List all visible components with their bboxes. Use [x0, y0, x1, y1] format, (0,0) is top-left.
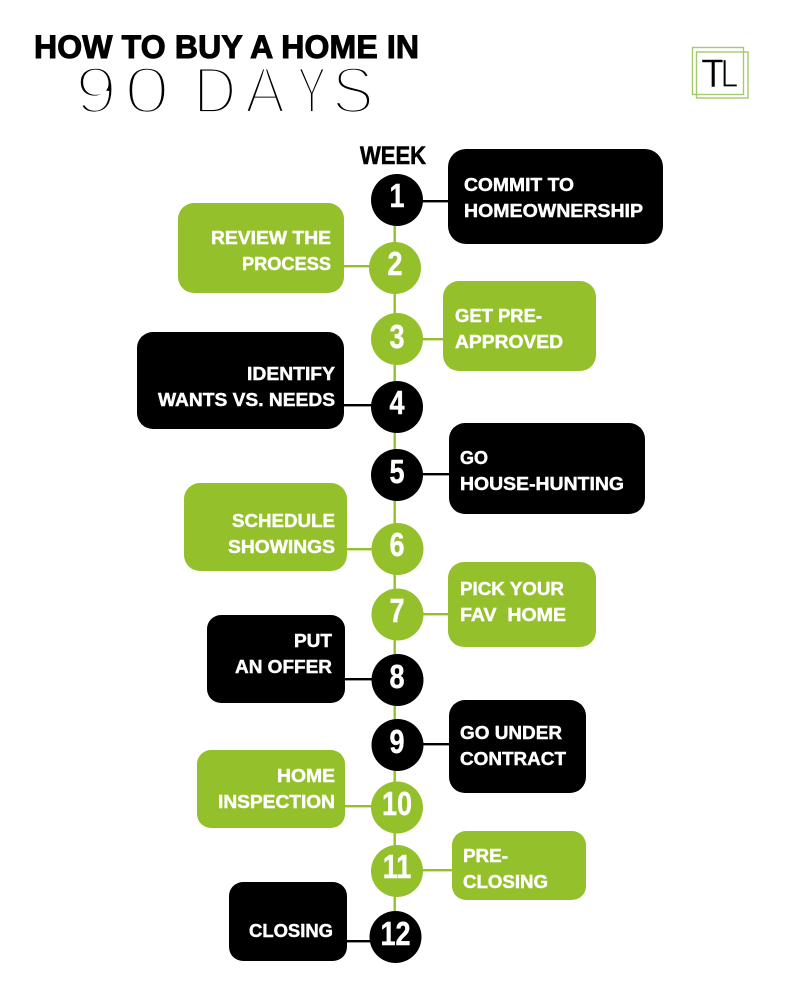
step 11: pre-closing: CLOSING [463, 872, 548, 892]
step 10: home inspection: INSPECTION [218, 792, 335, 812]
step 12: closing: 12 [380, 917, 411, 953]
step 11: pre-closing: 11 [383, 850, 411, 886]
step 10: home inspection [197, 750, 423, 834]
step 8: put an offer [207, 615, 424, 706]
step 11: pre-closing: PRE- [463, 846, 508, 866]
step 5: go house-hunting: 5 [389, 455, 405, 491]
timeline spine [394, 200, 396, 937]
step 4: identify wants vs. needs: IDENTIFY [247, 364, 335, 384]
step 8: put an offer: AN OFFER [235, 657, 332, 677]
logo: TL monogram: L [720, 51, 738, 96]
step 7: pick your fav home: 7 [389, 594, 405, 630]
logo: TL monogram: T [701, 52, 725, 96]
step 2: review the process: 2 [387, 247, 403, 283]
step 9: go under contract [372, 700, 586, 793]
step 6: schedule showings [184, 483, 424, 575]
step 9: go under contract: GO UNDER [460, 723, 562, 743]
step 2: review the process: PROCESS [242, 254, 331, 274]
title line: 90 days: A [245, 54, 285, 128]
step 7: pick your fav home [372, 562, 596, 647]
step 11: pre-closing [371, 831, 586, 900]
step 6: schedule showings: SHOWINGS [228, 537, 335, 557]
step 5: go house-hunting [371, 423, 645, 514]
week heading: WEEK [360, 142, 426, 170]
step 1: commit to homeownership: 1 [389, 179, 405, 215]
step 3: get pre-approved: 3 [389, 320, 405, 356]
step 8: put an offer: PUT [294, 631, 332, 651]
step 12: closing: CLOSING [249, 921, 333, 941]
step 1: commit to homeownership [371, 149, 663, 244]
step 7: pick your fav home: FAV HOME [460, 605, 566, 625]
step 7: pick your fav home: PICK YOUR [460, 579, 564, 599]
title line: how to buy a home in: HOW TO BUY A HOME IN [34, 29, 419, 65]
logo: TL monogram [692, 48, 748, 98]
title line: 90 days: D [194, 54, 236, 128]
title line: 90 days: Y [297, 53, 326, 127]
step 1: commit to homeownership: HOMEOWNERSHIP [464, 201, 643, 221]
step 8: put an offer: 8 [389, 660, 405, 696]
title [34, 29, 419, 128]
step 5: go house-hunting: HOUSE-HUNTING [460, 474, 624, 494]
step 3: get pre-approved: GET PRE- [455, 306, 542, 326]
step 2: review the process [178, 203, 421, 294]
step 9: go under contract: CONTRACT [460, 749, 566, 769]
step 1: commit to homeownership: COMMIT TO [464, 175, 574, 195]
title line: 90 days: S [332, 54, 374, 127]
step 6: schedule showings: 6 [389, 528, 405, 564]
step 2: review the process: REVIEW THE [211, 228, 331, 248]
title line: 90 days: 0 [124, 53, 170, 127]
step 4: identify wants vs. needs: WANTS VS. NEEDS [158, 390, 335, 410]
step 5: go house-hunting: GO [460, 448, 488, 468]
title line: 90 days [75, 53, 374, 128]
step 4: identify wants vs. needs [137, 332, 423, 433]
step 10: home inspection: HOME [277, 766, 335, 786]
step 10: home inspection: 10 [382, 787, 412, 823]
step 4: identify wants vs. needs: 4 [389, 386, 405, 422]
step 3: get pre-approved [371, 281, 596, 371]
step 3: get pre-approved: APPROVED [455, 332, 563, 352]
title line: 90 days: 9 [75, 55, 117, 128]
step 12: closing [229, 882, 422, 963]
step 9: go under contract: 9 [389, 725, 405, 761]
step 6: schedule showings: SCHEDULE [232, 511, 335, 531]
